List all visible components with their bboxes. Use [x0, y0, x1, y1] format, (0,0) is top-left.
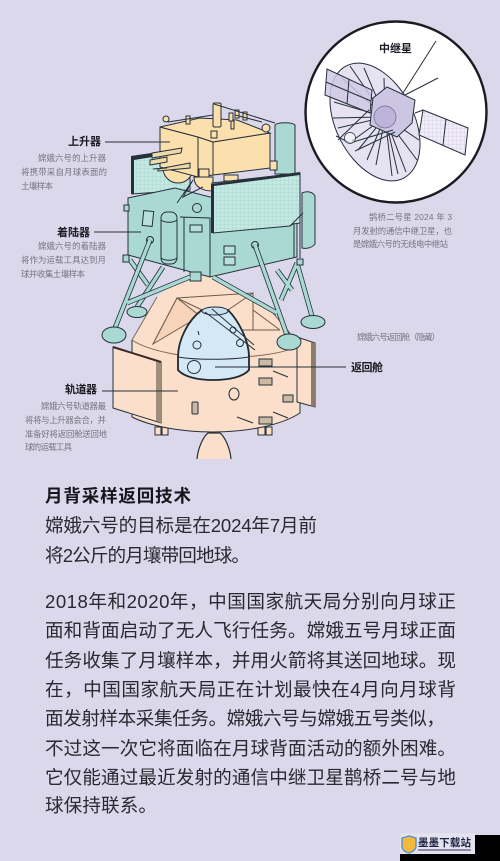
satellite caption	[353, 212, 452, 249]
orbiter right panel	[297, 337, 315, 407]
watermark logo	[400, 833, 475, 854]
tall tank	[270, 123, 295, 174]
satellite antennas	[336, 41, 438, 151]
front legs	[102, 240, 301, 350]
label: lander: 球并收集土壤样本	[21, 269, 86, 279]
spacecraft illustration	[102, 103, 325, 459]
label: ascender: 将携带采自月球表面的	[21, 167, 107, 177]
back legs	[127, 260, 325, 328]
body text	[45, 591, 456, 816]
orbiter left panel	[113, 347, 161, 423]
intro text: 将2公斤的月壤带回地球。	[45, 545, 250, 566]
label: ascender: 土壤样本	[21, 181, 54, 191]
label: orbiter	[25, 382, 178, 452]
intro text: 嫦娥六号的目标是在2024年7月前	[45, 515, 317, 536]
label: orbiter: 轨道器	[65, 382, 97, 396]
label: lander	[21, 225, 141, 279]
label: lander: 将作为运载工具达到月	[21, 255, 106, 265]
intro text	[45, 515, 317, 566]
label: orbiter: 将将与上升器会合，并	[25, 415, 106, 425]
lander back panel	[132, 150, 190, 194]
orbiter nozzle	[197, 433, 231, 459]
label: lander: 嫦娥六号的着陆器	[38, 241, 107, 251]
ascender module	[150, 103, 275, 203]
orbiter module	[113, 273, 315, 459]
label: ascender	[21, 134, 170, 191]
label: orbiter: 嫦娥六号轨道器最	[41, 401, 107, 411]
label: return capsule: 返回舱	[351, 360, 383, 374]
body text: 球保持联系。	[45, 795, 157, 816]
body text: 不过这一次它将面临在月球背面活动的额外困难。	[45, 738, 456, 759]
satellite right solar panel	[415, 110, 468, 155]
return capsule	[178, 307, 255, 380]
watermark corner	[400, 835, 500, 861]
body text: 它仅能通过最近发射的通信中继卫星鹊桥二号与地	[45, 767, 456, 788]
label: ascender: 嫦娥六号的上升器	[38, 153, 107, 163]
label: ascender: 上升器	[68, 134, 101, 148]
body text: 在，中国国家航天局正在计划最快在4月向月球背	[45, 679, 456, 700]
satellite body	[370, 87, 415, 137]
label: orbiter: 球的运载工具	[25, 442, 73, 452]
relay satellite inset	[306, 22, 486, 202]
label: orbiter: 准备好将返回舱送回地	[25, 429, 108, 439]
capsule hidden note: 嫦娥六号返回舱（隐藏）	[357, 332, 440, 342]
satellite left solar panel	[325, 69, 372, 113]
article heading: 月背采样返回技术	[45, 486, 192, 506]
satellite caption: 鹊桥二号星 2024 年 3	[369, 212, 452, 222]
lander front panel	[211, 172, 303, 258]
body text: 2018年和2020年，中国国家航天局分别向月球正	[45, 591, 456, 612]
right tank	[302, 192, 315, 248]
satellite dish	[312, 48, 438, 196]
satellite caption: 是嫦娥六号的无线电中继站	[353, 239, 449, 249]
body text: 面和背面启动了无人飞行任务。嫦娥五号月球正面	[45, 620, 456, 641]
body text: 面发射样本采集任务。嫦娥六号与嫦娥五号类似，	[45, 708, 445, 729]
body text: 任务收集了月壤样本，并用火箭将其送回地球。现	[45, 650, 456, 671]
orbiter details	[192, 359, 293, 424]
satellite label: 中继星	[379, 41, 412, 55]
lander body	[123, 188, 303, 281]
satellite caption: 月发射的通信中继卫星，也	[353, 226, 452, 236]
watermark logo: 墨墨下载站	[418, 836, 472, 849]
label: lander: 着陆器	[57, 225, 90, 239]
